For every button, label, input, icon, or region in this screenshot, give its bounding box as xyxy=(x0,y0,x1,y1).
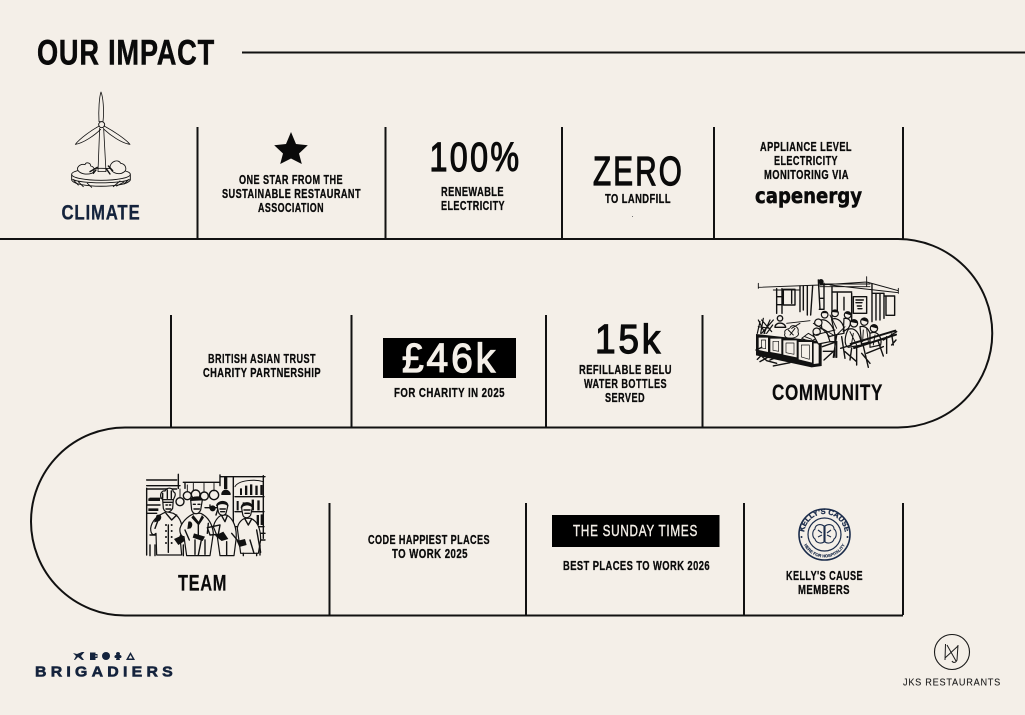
text: renewable electricity xyxy=(441,185,505,213)
panel: charity partnership: CHARITY PARTNERSHIP xyxy=(203,366,321,380)
panel: renewable xyxy=(430,134,522,213)
server one xyxy=(213,515,236,556)
text: appliance monitoring: MONITORING VIA xyxy=(764,168,849,182)
wordmark: brigadiers: BRIGADIERS xyxy=(35,664,177,680)
text: kelly's cause members: KELLY'S CAUSE xyxy=(786,569,863,583)
logo: capenergy: capenergy xyxy=(755,184,862,208)
panel: capenergy xyxy=(755,140,862,208)
timeline path xyxy=(0,239,992,616)
text: appliance monitoring xyxy=(760,140,852,182)
text: refillable bottles: SERVED xyxy=(605,391,645,405)
label: community: COMMUNITY xyxy=(772,380,883,405)
logo: kelly's cause badge: KELLY'S CAUSE xyxy=(800,510,849,532)
stat box: £46k: £46k xyxy=(402,335,498,381)
badge: the sunday times xyxy=(552,515,720,547)
chef one xyxy=(151,512,182,555)
panel: charity raised xyxy=(383,335,516,400)
text: appliance monitoring: APPLIANCE LEVEL xyxy=(760,140,852,154)
text: refillable bottles xyxy=(579,363,672,405)
text: renewable electricity: ELECTRICITY xyxy=(441,199,505,213)
stat: 15k: 15k xyxy=(595,316,663,362)
logo: brigadiers xyxy=(35,652,177,680)
logo: kelly's cause badge xyxy=(798,508,851,561)
icons: brigadiers row xyxy=(73,652,135,660)
logo: jks restaurants xyxy=(903,634,1001,688)
panel: zero landfill xyxy=(593,148,684,217)
panel: sunday times xyxy=(552,515,720,573)
panel: community xyxy=(756,277,898,405)
panel: code happiest places xyxy=(368,533,490,561)
badge: the sunday times: THE SUNDAY TIMES xyxy=(573,523,698,540)
server two xyxy=(237,518,261,553)
label: climate: CLIMATE xyxy=(62,202,140,224)
wordmark: jks restaurants: JKS RESTAURANTS xyxy=(903,678,1001,688)
text: refillable bottles: WATER BOTTLES xyxy=(584,377,667,391)
illustration: restaurant terrace xyxy=(756,277,898,367)
panel: one star xyxy=(222,132,361,215)
diners xyxy=(821,318,850,338)
text: renewable electricity: RENEWABLE xyxy=(441,185,504,199)
panel: kelly's cause xyxy=(786,508,863,597)
chef two xyxy=(180,513,213,556)
text: one star xyxy=(222,173,361,215)
text: best places: BEST PLACES TO WORK 2026 xyxy=(563,559,710,573)
label: team: TEAM xyxy=(178,570,227,596)
text: kelly's cause members xyxy=(786,569,863,597)
icon: star xyxy=(274,132,308,164)
panel: team xyxy=(147,474,265,596)
text: for charity: FOR CHARITY IN 2025 xyxy=(394,386,505,400)
title: OUR IMPACT xyxy=(37,34,215,72)
text: refillable bottles: REFILLABLE BELU xyxy=(579,363,672,377)
text: to landfill: TO LANDFILL xyxy=(605,192,671,206)
panel: code happiest places: TO WORK 2025 xyxy=(392,547,468,561)
panel: charity partnership: BRITISH ASIAN TRUST xyxy=(208,352,316,366)
stat: 100%: 100% xyxy=(430,134,522,180)
logo: kelly's cause badge: HERE FOR HOSPITALITY xyxy=(804,544,844,558)
text: kelly's cause members: MEMBERS xyxy=(798,583,850,597)
panel: code happiest places: CODE HAPPIEST PLACES xyxy=(368,533,490,547)
text: one star: ONE STAR FROM THE xyxy=(239,173,343,187)
icon: jks monogram xyxy=(934,634,970,670)
icon: wind turbine xyxy=(72,92,130,187)
panel: climate xyxy=(62,92,140,224)
panel: charity partnership xyxy=(203,352,321,380)
illustration: kitchen team xyxy=(147,474,265,556)
text: one star: ASSOCIATION xyxy=(258,201,324,215)
text: appliance monitoring: ELECTRICITY xyxy=(774,154,838,168)
planter boxes xyxy=(756,334,822,367)
text: one star: SUSTAINABLE RESTAURANT xyxy=(222,187,361,201)
stat: zero: ZERO xyxy=(593,148,684,194)
panel: belu bottles xyxy=(579,316,672,405)
